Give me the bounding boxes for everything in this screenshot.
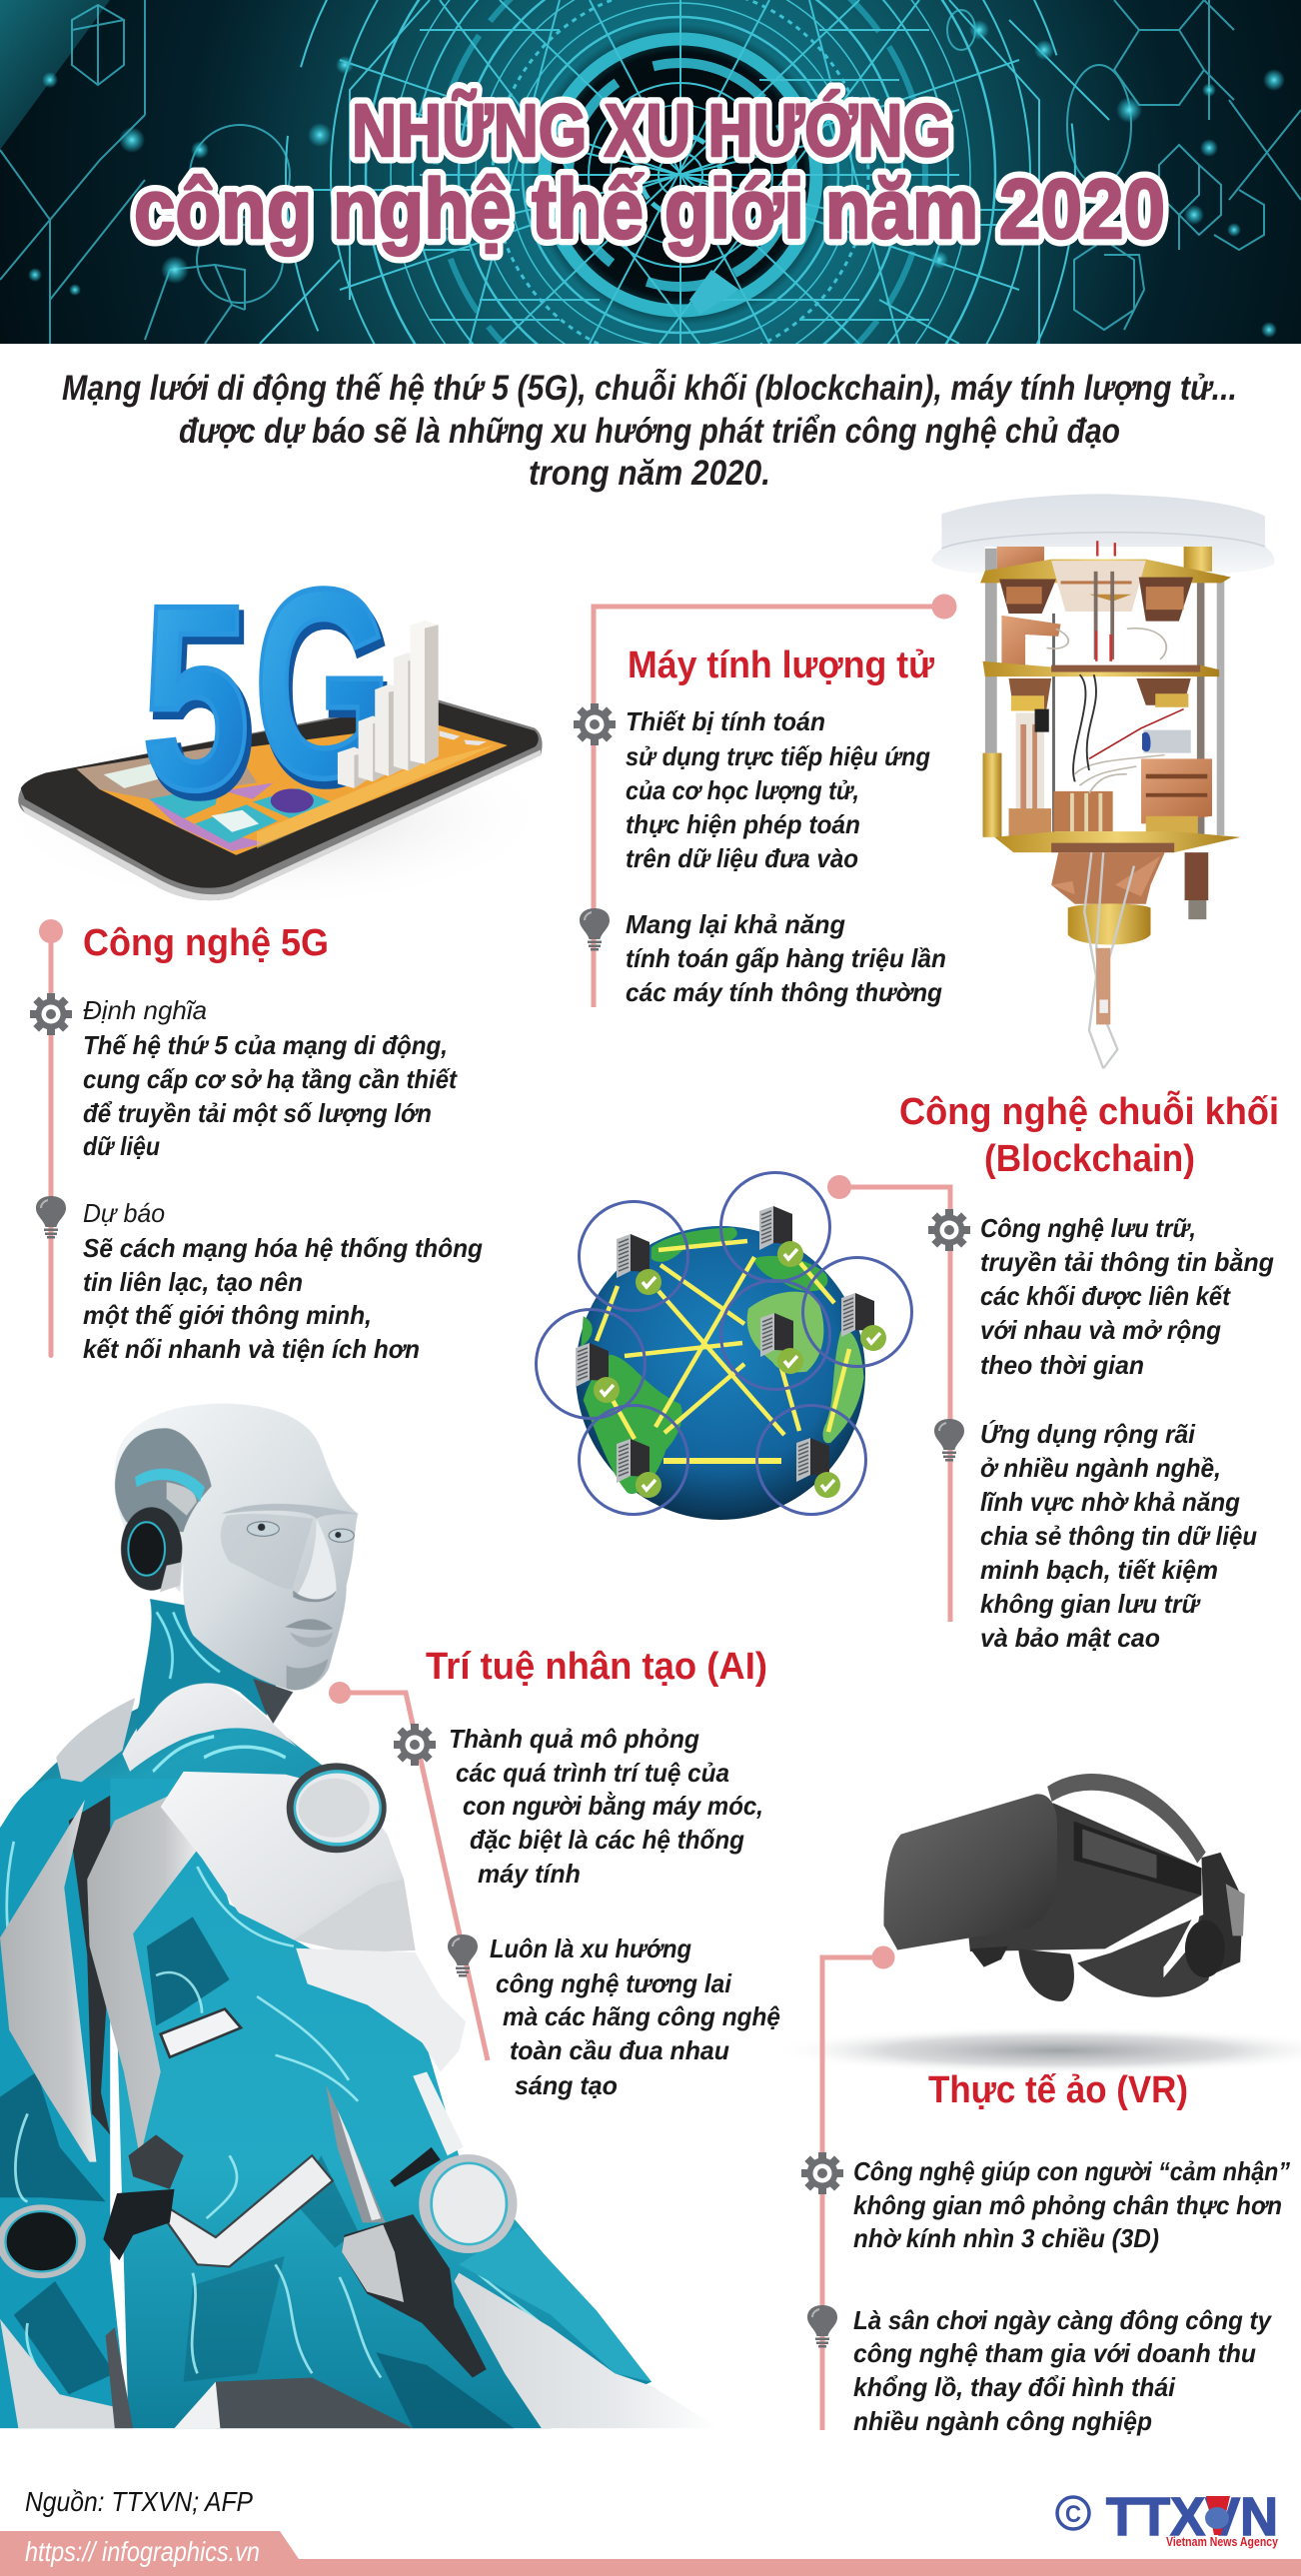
title: NHỮNG XU HƯỚNG xyxy=(352,89,951,172)
text block: applications: Ứng dụng rộng rãi xyxy=(980,1419,1196,1449)
forearm guard xyxy=(296,1948,466,2071)
text block: forecast: kết nối nhanh và tiện ích hơn xyxy=(83,1334,420,1364)
panel: artificial intelligence xyxy=(0,1404,780,2428)
text block: definition: trên dữ liệu đưa vào xyxy=(626,843,858,873)
heading: Máy tính lượng tử xyxy=(628,644,934,686)
lower arm xyxy=(459,2227,651,2382)
illustration: phone with 5G xyxy=(0,534,556,909)
text block: definition: không gian mô phỏng chân thực hơn xyxy=(853,2190,1282,2220)
shoulder plate xyxy=(161,1772,416,1952)
text block: definition: Thế hệ thứ 5 của mạng di động, xyxy=(83,1030,448,1060)
panel: virtual reality xyxy=(769,1782,1301,2436)
heading: (Blockchain) xyxy=(984,1138,1195,1180)
illustration: VR headset xyxy=(883,1782,1245,2001)
text block: definition xyxy=(853,2156,1290,2253)
text block: definition: để truyền tải một số lượng lớn xyxy=(83,1098,432,1128)
text block: definition: truyền tải thông tin bằng xyxy=(980,1247,1274,1277)
heading: Thực tế ảo (VR) xyxy=(928,2069,1188,2111)
logo: TTXVN: Vietnam News Agency xyxy=(1166,2534,1279,2549)
illustration: quantum computer xyxy=(931,494,1274,1068)
connector line xyxy=(594,594,957,1007)
icon: gear xyxy=(394,1724,436,1766)
text block: trend: sáng tạo xyxy=(515,2070,618,2100)
3D 5G numerals: 5 xyxy=(146,558,255,851)
intro text: trong năm 2020. xyxy=(529,454,770,493)
icon: bulb xyxy=(36,1196,66,1239)
intro text xyxy=(62,368,1237,493)
headset shadow xyxy=(769,2026,1301,2074)
text block: definition: với nhau và mở rộng xyxy=(980,1315,1221,1345)
text block: definition: dữ liệu xyxy=(83,1131,160,1161)
text block: trend xyxy=(490,1933,780,2100)
text block: industry impact xyxy=(853,2305,1272,2436)
continents xyxy=(581,1227,864,1494)
text block: definition: con người bằng máy móc, xyxy=(463,1791,763,1821)
icon: bulb xyxy=(448,1934,478,1976)
text block: benefit: tính toán gấp hàng triệu lần xyxy=(626,943,946,973)
text block: definition: các khối được liên kết xyxy=(980,1281,1231,1311)
icon: bulb xyxy=(934,1419,964,1461)
text block: benefit: Mang lại khả năng xyxy=(626,909,845,939)
text block: definition xyxy=(449,1724,763,1889)
icon: gear xyxy=(928,1209,970,1251)
text block: definition: nhờ kính nhìn 3 chiều (3D) xyxy=(853,2223,1159,2253)
text block: definition: Thiết bị tính toán xyxy=(626,706,825,736)
text block: applications: minh bạch, tiết kiệm xyxy=(980,1555,1218,1585)
text block: forecast: một thế giới thông minh, xyxy=(83,1300,372,1330)
icon: bulb xyxy=(807,2305,837,2348)
back plates xyxy=(0,1800,96,2162)
icon: bulb xyxy=(580,908,610,951)
title: công nghệ thế giới năm 2020 xyxy=(134,162,1165,256)
text block: definition: theo thời gian xyxy=(980,1350,1144,1380)
text block: applications: và bảo mật cao xyxy=(980,1623,1160,1653)
text block: trend: toàn cầu đua nhau xyxy=(510,2035,729,2065)
header banner xyxy=(0,0,1301,344)
text block: definition: các quá trình trí tuệ của xyxy=(456,1758,729,1788)
heading: Trí tuệ nhân tạo (AI) xyxy=(426,1646,767,1688)
source credit: Nguồn: TTXVN; AFP xyxy=(25,2486,253,2517)
3D 5G numerals: G xyxy=(254,534,393,833)
network links xyxy=(597,1241,849,1461)
title: công nghệ thế giới năm 2020 xyxy=(134,162,1165,256)
bottom plate xyxy=(216,2377,413,2428)
text block: definition xyxy=(626,706,930,873)
chest chevron xyxy=(165,2155,333,2266)
text block: definition: Thành quả mô phỏng xyxy=(449,1724,699,1754)
icon: gear xyxy=(30,993,72,1035)
text block: forecast: Dự báo xyxy=(83,1198,165,1228)
illustration: robot xyxy=(0,1404,719,2428)
connector line xyxy=(329,1682,488,2060)
text block: definition: sử dụng trực tiếp hiệu ứng xyxy=(626,741,930,771)
text block: applications: chia sẻ thông tin dữ liệu xyxy=(980,1521,1257,1551)
text block: applications xyxy=(980,1419,1257,1653)
text block: definition: của cơ học lượng tử, xyxy=(626,775,859,805)
heading: Công nghệ 5G xyxy=(83,922,329,964)
icon: gear xyxy=(574,703,616,745)
text block: definition xyxy=(83,995,458,1161)
text block: applications: không gian lưu trữ xyxy=(980,1589,1201,1619)
heading: Công nghệ chuỗi khối xyxy=(899,1089,1279,1133)
text block: trend: mà các hãng công nghệ xyxy=(503,2001,780,2031)
bar chart towers xyxy=(338,621,439,788)
elbow ring xyxy=(0,2204,86,2278)
logo: TTXVN: TTXVN xyxy=(1106,2487,1278,2547)
text block: applications: ở nhiều ngành nghề, xyxy=(980,1453,1221,1483)
teal highlights xyxy=(7,1842,643,2390)
website url: https:// infographics.vn xyxy=(25,2536,260,2567)
title xyxy=(134,89,1165,256)
3D 5G numerals xyxy=(142,534,396,851)
text block: definition: Định nghĩa xyxy=(83,995,207,1025)
text block: forecast: tin liên lạc, tạo nên xyxy=(83,1267,303,1297)
panel: blockchain xyxy=(536,1089,1279,1653)
text block: forecast: Sẽ cách mạng hóa hệ thống thông xyxy=(83,1233,483,1263)
text block: industry impact: khổng lồ, thay đổi hình thái xyxy=(853,2372,1176,2402)
silver spike xyxy=(326,2084,386,2222)
node rings xyxy=(536,1173,911,1515)
text block: definition: đặc biệt là các hệ thống xyxy=(470,1825,744,1855)
illustration: globe network xyxy=(536,1173,911,1520)
connector line xyxy=(822,1946,895,2430)
3D 5G numerals: 5 xyxy=(142,552,250,844)
logo: TTXVN: C xyxy=(1065,2501,1081,2528)
text block: definition: cung cấp cơ sở hạ tầng cần thiết xyxy=(83,1064,458,1094)
title: NHỮNG XU HƯỚNG xyxy=(352,89,951,172)
3D 5G numerals: G xyxy=(257,541,396,840)
text block: trend: công nghệ tương lai xyxy=(496,1968,732,1998)
text block: definition: Công nghệ lưu trữ, xyxy=(980,1213,1196,1243)
text block: forecast xyxy=(83,1198,483,1364)
footer bar xyxy=(0,2531,1301,2576)
heading xyxy=(899,1089,1279,1180)
panel: quantum computer xyxy=(574,494,1274,1068)
wrist joint xyxy=(342,2214,487,2377)
text block: benefit: các máy tính thông thường xyxy=(626,977,942,1007)
text block: applications: lĩnh vực nhờ khả năng xyxy=(980,1487,1240,1517)
text block: trend: Luôn là xu hướng xyxy=(490,1933,691,1963)
text block: industry impact: Là sân chơi ngày càng đông công ty xyxy=(853,2305,1272,2335)
text block: benefit xyxy=(626,909,946,1007)
icon: gear xyxy=(801,2152,843,2194)
text block: definition xyxy=(980,1213,1274,1380)
teal shading xyxy=(0,1917,514,2428)
text block: industry impact: công nghệ tham gia với doanh thu xyxy=(853,2338,1256,2368)
connector line xyxy=(39,919,63,1358)
nodes xyxy=(576,1206,886,1498)
panel: 5G xyxy=(0,534,556,1364)
intro text: được dự báo sẽ là những xu hướng phát triển công nghệ chủ đạo xyxy=(179,412,1120,451)
text block: definition: máy tính xyxy=(478,1859,581,1889)
connector line xyxy=(827,1175,950,1622)
text block: definition: thực hiện phép toán xyxy=(626,809,860,839)
text block: industry impact: nhiều ngành công nghiệp xyxy=(853,2406,1152,2436)
